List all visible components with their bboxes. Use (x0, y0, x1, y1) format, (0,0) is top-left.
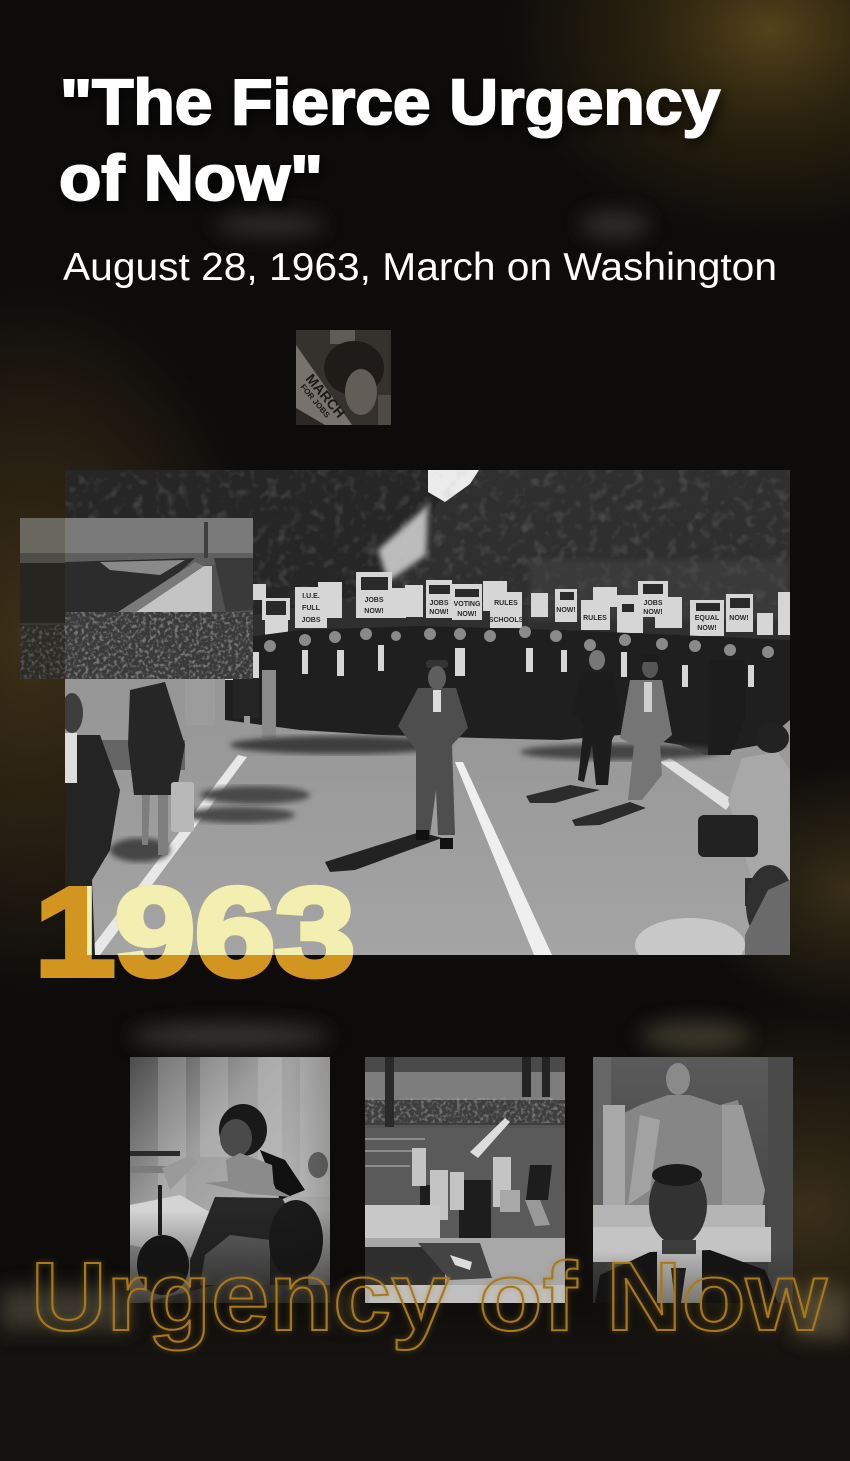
trees and sky (65, 470, 790, 650)
left foreground people (61, 682, 194, 955)
title (59, 66, 720, 214)
road markings and shadows (65, 736, 733, 955)
bottom glow band (0, 1288, 850, 1338)
photo: reflecting pool overlay (20, 518, 253, 679)
sign lettering: NOW! (697, 625, 717, 632)
photo: protester with march sign: FOR JOBS (298, 383, 332, 420)
photo: protester with march sign: MARCH (303, 371, 348, 421)
sign lettering: VOTING (454, 601, 481, 608)
walking marchers (578, 650, 732, 800)
outlined text: Urgency of Now: Urgency of Now (31, 1242, 828, 1351)
subtitle: August 28, 1963, March on Washington (63, 246, 777, 289)
photo: marchers on the mall (365, 1057, 565, 1303)
photo: A. Philip Randolph at the Lincoln Memorial (593, 1057, 793, 1303)
sign lettering: RULES (583, 615, 607, 622)
year 1963: 1963 (35, 863, 355, 1002)
year 1963: 1963 (35, 863, 355, 1002)
sign lettering: NOW! (429, 609, 449, 616)
sign lettering: EQUAL (695, 615, 720, 622)
sign lettering: JOBS (429, 600, 449, 607)
sign lettering: NOW! (364, 608, 384, 615)
photo: main march on Washington (61, 470, 794, 972)
sign lettering: I.U.E. (302, 593, 320, 600)
sign lettering: NOW! (643, 609, 663, 616)
sign lettering: JOBS (301, 617, 321, 624)
sign lettering: JOBS (364, 597, 384, 604)
year 1963 (40, 884, 354, 980)
protest signs (252, 572, 790, 636)
sign lettering (266, 577, 750, 632)
photo: protester with march sign (296, 330, 391, 425)
sign lettering: SCHOOLS (489, 617, 524, 624)
title: of Now" (59, 142, 323, 214)
sign lettering: NOW! (556, 607, 576, 614)
sign lettering: JOBS (643, 600, 663, 607)
sign lettering: FULL (302, 605, 321, 612)
sign lettering: NOW! (457, 611, 477, 618)
title: "The Fierce Urgency (60, 66, 720, 138)
photo: King at the microphones (130, 1057, 330, 1303)
crowd (185, 626, 790, 755)
sign lettering: RULES (494, 600, 518, 607)
right foreground woman (635, 726, 790, 955)
central marcher (398, 660, 468, 849)
sign lettering: NOW! (729, 615, 749, 622)
